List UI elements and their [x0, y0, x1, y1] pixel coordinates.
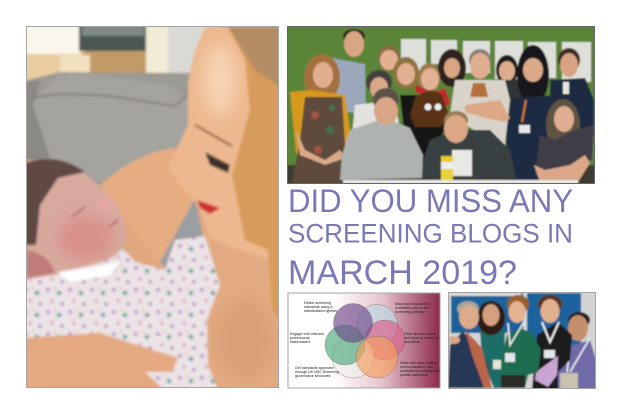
Venn labels: Engage with relevant	[290, 332, 324, 336]
strap	[160, 198, 203, 272]
woman 1	[448, 332, 490, 388]
left woman	[304, 54, 340, 102]
Venn labels: Work with data, editing,	[400, 361, 437, 365]
Venn labels: standards using a	[304, 305, 332, 309]
heading: Did you miss any screening blogs in March 2019?: MARCH 2019?	[288, 254, 517, 292]
eye	[205, 152, 230, 173]
Venn labels: Map each standard to	[395, 302, 430, 306]
Venn labels: professional	[290, 336, 310, 340]
central woman	[450, 80, 510, 145]
woman 4	[532, 322, 572, 390]
woman 5	[555, 340, 596, 390]
hair	[231, 32, 278, 319]
diagram: six-circle Venn of standards review process	[288, 293, 442, 388]
Venn labels: governance structures	[295, 374, 331, 378]
scarf woman	[400, 95, 445, 170]
heading: Did you miss any screening blogs in March 2019?: DID YOU MISS ANY	[288, 183, 573, 219]
chest	[200, 220, 285, 395]
heading: Did you miss any screening blogs in March 2019?	[288, 183, 573, 292]
Venn labels: Define screening	[304, 301, 331, 305]
photo: five women at a conference	[446, 290, 598, 390]
back row	[332, 58, 366, 115]
Venn labels: screening pathway	[395, 310, 425, 314]
poop toy	[410, 91, 450, 127]
Venn labels: standardised typeset	[304, 309, 337, 313]
lips	[197, 200, 220, 214]
Venn labels: publish standards	[400, 373, 428, 377]
Venn labels: Clear time to review	[404, 332, 436, 336]
clothes	[20, 236, 220, 395]
heading: Did you miss any screening blogs in March 2019?: SCREENING BLOGS IN	[288, 218, 573, 248]
soft tone patches	[57, 44, 273, 380]
Venn labels: a suitable point in the	[395, 306, 429, 310]
shoulder	[99, 146, 178, 199]
Venn labels: professional colleagues to	[400, 369, 442, 373]
sofa	[27, 70, 191, 187]
right seated woman	[545, 98, 581, 140]
Venn labels	[290, 301, 442, 378]
woman 2	[480, 330, 505, 388]
Venn labels: and input to review of	[404, 336, 438, 340]
seated man grey jumper	[340, 118, 423, 180]
Venn labels: through UK NSC Screening	[295, 370, 339, 374]
Venn labels: Get standards approved	[295, 366, 334, 370]
hand and arm	[27, 332, 179, 387]
Venn circles	[325, 304, 405, 378]
posters	[401, 39, 591, 82]
Venn labels: standards	[404, 340, 420, 344]
long hair woman	[517, 45, 549, 105]
seated man jacket	[423, 130, 516, 178]
Venn labels: communications and	[400, 365, 433, 369]
photo: screening team group holding toy	[285, 24, 597, 186]
face	[168, 27, 270, 260]
table and cup	[343, 180, 578, 184]
right man	[550, 78, 594, 135]
Venn labels: stakeholders	[290, 340, 311, 344]
glasses woman	[352, 102, 400, 130]
photo: mother holding newborn baby	[20, 20, 285, 395]
woman 3	[501, 328, 541, 388]
baby head	[27, 171, 128, 280]
